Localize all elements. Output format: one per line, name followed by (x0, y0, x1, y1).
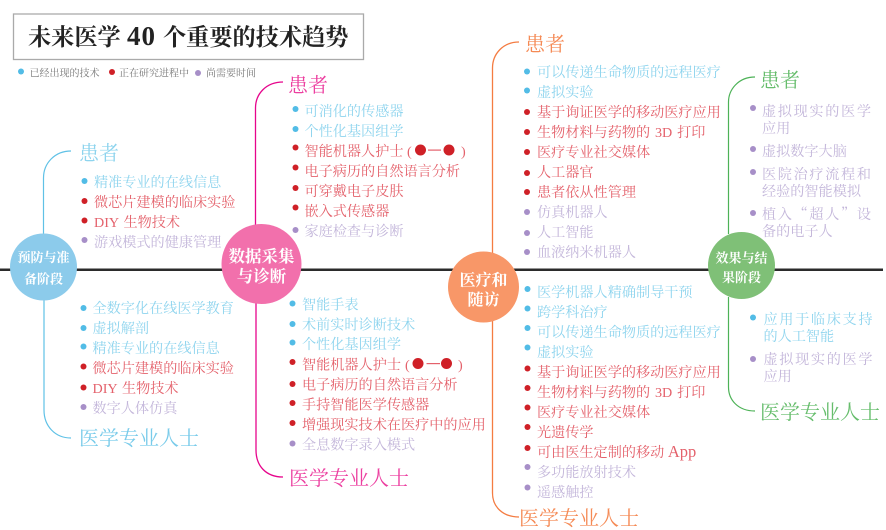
panel: stage 3 patients: 基于询证医学的移动医疗应用 (537, 104, 721, 121)
title box: 未来医学 (28, 25, 121, 51)
title box: 个重要的技术趋势 (163, 25, 348, 51)
panel: stage 4 patients: 备的电子人 (762, 223, 833, 240)
panel: stage 4 medical professionals: 应用 (764, 369, 792, 385)
panel: stage 2 medical professionals: 电子病历的自然语言分析 (302, 376, 458, 393)
stage 4 circle: outcomes (708, 232, 775, 299)
panel: stage 1 medical professionals (79, 300, 234, 450)
stage 1 circle: prevention and preparation (10, 234, 77, 300)
panel: stage 4 medical professionals: 应用于临床支持 (764, 311, 872, 328)
panel: stage 3 medical professionals: 医学专业人士 (519, 507, 639, 530)
legend: 尚需要时间 (206, 66, 256, 80)
panel: stage 1 patients (79, 142, 235, 251)
panel: stage 4 patients: 虚拟数字大脑 (762, 143, 847, 160)
legend (18, 66, 256, 80)
panel: stage 4 patients: 植入“超人”设 (762, 204, 871, 224)
panel: stage 1 patients: 患者 (79, 142, 119, 165)
stage 2 circle: data collection and diagnosis (222, 224, 302, 304)
panel: stage 1 patients: 微芯片建模的临床实验 (94, 194, 235, 211)
legend: 正在研究进程中 (119, 66, 189, 80)
panel: stage 3 medical professionals: 基于询证医学的移动医疗应用 (537, 364, 721, 381)
panel: stage 3 patients: 人工器官 (537, 165, 594, 181)
panel: stage 4 patients: 患者 (760, 69, 800, 92)
panel: stage 4 patients (750, 69, 871, 240)
panel: stage 3 medical professionals: 光遗传学 (537, 424, 594, 441)
panel: stage 2 patients: 电子病历的自然语言分析 (304, 163, 460, 180)
stage 4 branch lines (728, 77, 755, 411)
stage 1 circle: prevention and preparation: 预防与准 (17, 250, 70, 265)
panel: stage 2 patients: ( (407, 144, 412, 160)
panel: stage 3 medical professionals: 跨学科治疗 (537, 304, 608, 321)
panel: stage 3 patients: 患者依从性管理 (537, 184, 636, 201)
panel: stage 2 patients: 智能机器人护士 (304, 143, 403, 160)
stage 3 branch lines (492, 42, 519, 517)
panel: stage 4 patients: 虚拟现实的医学 (762, 103, 871, 120)
panel: stage 3 medical professionals: 医疗专业社交媒体 (537, 404, 650, 421)
panel: stage 1 medical professionals: 数字人体仿真 (92, 400, 178, 417)
panel: stage 2 medical professionals: 手持智能医学传感器 (302, 396, 429, 413)
panel: stage 3 patients: 人工智能 (537, 224, 594, 241)
panel: stage 3 patients (524, 33, 721, 261)
stage 2 circle: data collection and diagnosis: 与诊断 (237, 266, 287, 286)
panel: stage 1 patients: DIY 生物技术 (94, 214, 180, 231)
panel: stage 2 medical professionals: 术前实时诊断技术 (302, 316, 415, 333)
panel: stage 2 medical professionals: 增强现实技术在医疗中的应用 (302, 416, 486, 433)
panel: stage 1 patients: 游戏模式的健康管理 (94, 234, 221, 251)
panel: stage 1 medical professionals: 全数字化在线医学教育 (92, 300, 234, 317)
panel: stage 1 medical professionals: 微芯片建模的临床实验 (92, 360, 234, 377)
panel: stage 2 medical professionals: ( (405, 357, 410, 373)
panel: stage 1 medical professionals: DIY 生物技术 (92, 380, 179, 397)
panel: stage 4 medical professionals (750, 311, 880, 424)
panel: stage 4 medical professionals: 的人工智能 (764, 328, 834, 345)
panel: stage 3 medical professionals: 虚拟实验 (537, 344, 594, 361)
panel: stage 2 patients: 可穿戴电子皮肤 (304, 183, 403, 200)
legend: 已经出现的技术 (30, 66, 100, 80)
panel: stage 3 patients: 患者 (525, 33, 565, 56)
stage 4 circle: outcomes: 果阶段 (722, 270, 761, 285)
title box: 40 (127, 21, 156, 51)
panel: stage 2 medical professionals (289, 296, 486, 490)
panel: stage 3 medical professionals: 遥感触控 (537, 484, 594, 501)
panel: stage 3 medical professionals: 生物材料与药物的 3D 打印 (537, 384, 705, 401)
panel: stage 2 medical professionals: 全息数字录入模式 (302, 436, 415, 453)
stage 3 circle: treatment and follow-up: 医疗和 (459, 271, 508, 289)
panel: stage 4 patients: 医院治疗流程和 (762, 166, 871, 183)
stage 4 circle: outcomes: 效果与结 (715, 250, 768, 265)
panel: stage 4 patients: 经验的智能模拟 (762, 183, 862, 200)
stage 2 branch lines (256, 82, 283, 477)
panel: stage 3 medical professionals: 可以传递生命物质的远程医疗 (537, 324, 721, 341)
panel: stage 1 medical professionals: 医学专业人士 (79, 427, 199, 450)
panel: stage 3 patients: 生物材料与药物的 3D 打印 (537, 124, 705, 141)
panel: stage 2 patients (288, 74, 466, 240)
timeline axis (0, 268, 883, 271)
panel: stage 2 medical professionals: ) (458, 357, 463, 373)
panel: stage 3 patients: 医疗专业社交媒体 (537, 144, 650, 161)
stage 3 circle: treatment and follow-up (448, 252, 519, 322)
panel: stage 1 medical professionals: 精准专业的在线信息 (92, 340, 221, 357)
panel: stage 3 medical professionals: 多功能放射技术 (537, 464, 636, 481)
panel: stage 1 patients: 精准专业的在线信息 (94, 174, 222, 191)
panel: stage 2 patients: 患者 (288, 74, 328, 97)
panel: stage 2 patients: ) (461, 144, 466, 160)
panel: stage 4 medical professionals: 虚拟现实的医学 (764, 351, 872, 368)
panel: stage 4 patients: 应用 (762, 121, 790, 137)
panel: stage 2 medical professionals: 智能机器人护士 (302, 356, 401, 373)
stage 1 branch lines (44, 151, 71, 438)
panel: stage 1 medical professionals: 虚拟解剖 (92, 320, 149, 337)
panel: stage 3 medical professionals: 可由医生定制的移动 App (537, 442, 696, 461)
panel: stage 2 patients: 嵌入式传感器 (304, 203, 389, 220)
panel: stage 3 patients: 可以传递生命物质的远程医疗 (537, 64, 721, 81)
panel: stage 3 patients: 血液纳米机器人 (537, 244, 636, 261)
panel: stage 3 patients: 仿真机器人 (537, 204, 608, 221)
panel: stage 2 patients: 家庭检查与诊断 (304, 223, 403, 240)
stage 1 circle: prevention and preparation: 备阶段 (24, 271, 63, 286)
panel: stage 3 patients: 虚拟实验 (537, 84, 594, 101)
title box (14, 14, 364, 60)
panel: stage 2 medical professionals: 个性化基因组学 (302, 336, 401, 353)
panel: stage 2 patients: 可消化的传感器 (304, 103, 403, 120)
panel: stage 4 medical professionals: 医学专业人士 (760, 401, 880, 424)
panel: stage 3 medical professionals: 医学机器人精确制导干预 (537, 284, 693, 301)
stage 3 circle: treatment and follow-up: 随访 (467, 290, 500, 309)
panel: stage 2 medical professionals: 医学专业人士 (289, 467, 409, 490)
panel: stage 2 patients: 个性化基因组学 (304, 123, 403, 140)
panel: stage 2 medical professionals: 智能手表 (302, 296, 359, 313)
stage 2 circle: data collection and diagnosis: 数据采集 (228, 246, 295, 266)
panel: stage 3 medical professionals (519, 284, 721, 530)
